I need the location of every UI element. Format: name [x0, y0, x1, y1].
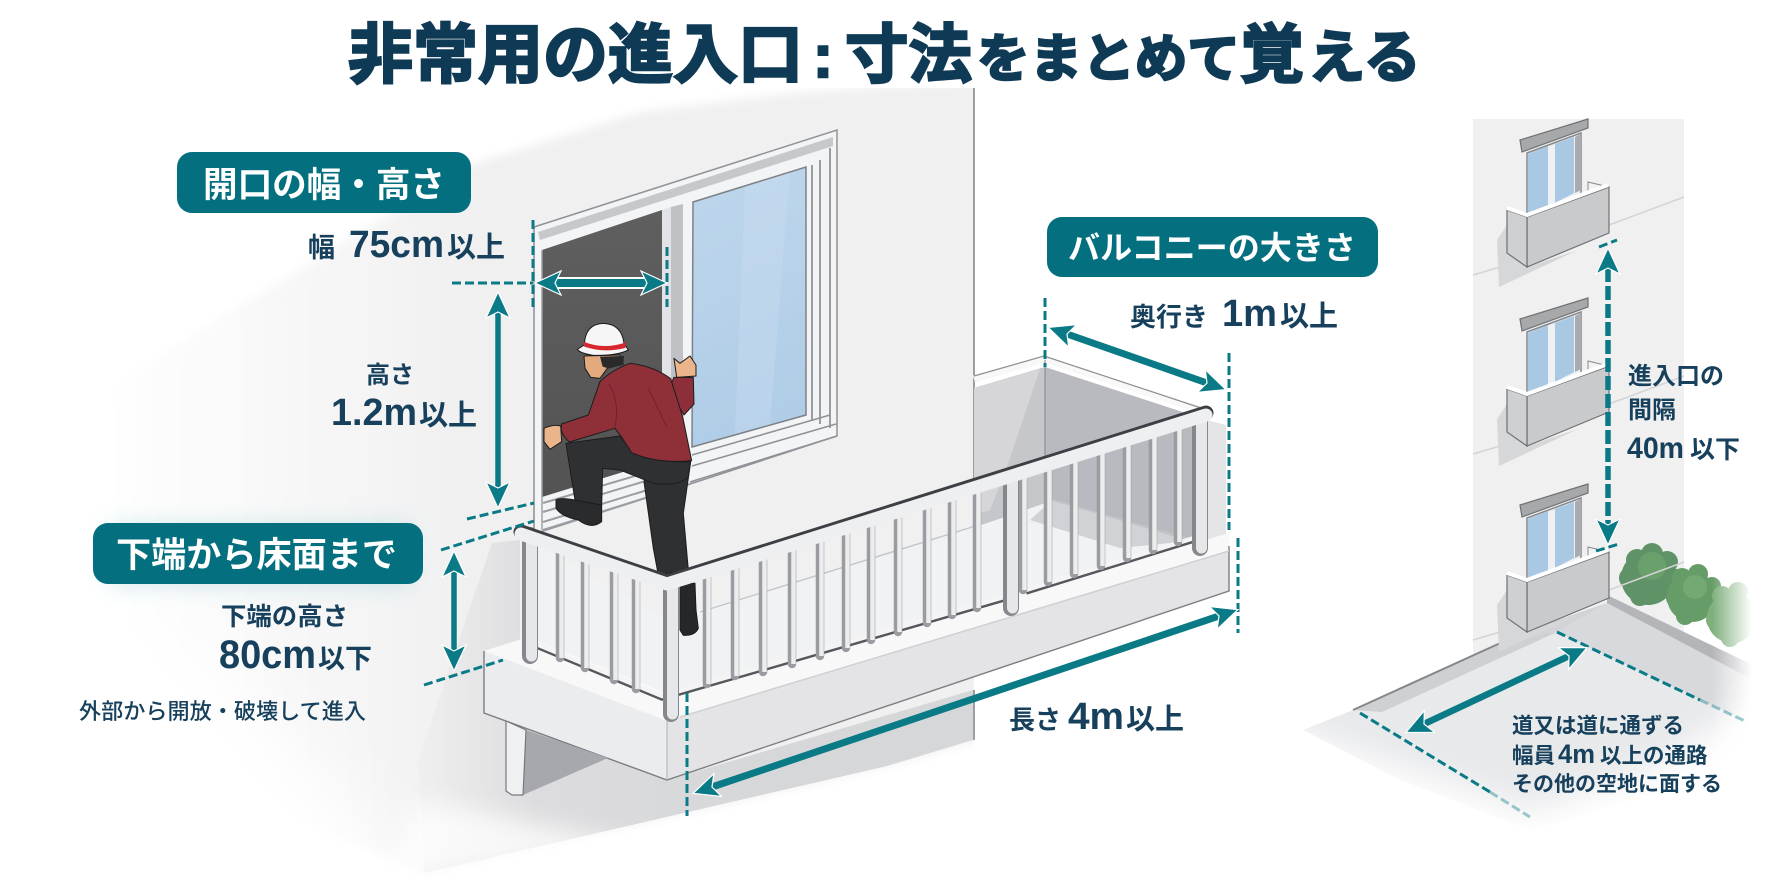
worker climbing in	[544, 323, 698, 635]
fade at foot of shadow	[380, 800, 640, 880]
text: width 75cm or more: 以上	[447, 231, 505, 264]
text: depth 1m or more: 以上	[1280, 300, 1338, 333]
text: length 4m or more: 4m	[1068, 696, 1124, 738]
white helmet	[577, 323, 628, 355]
text: faces road or open space: 4m	[1558, 739, 1595, 769]
title: 寸法	[845, 19, 972, 91]
text: length 4m or more: 長さ	[1009, 705, 1061, 735]
title: :	[813, 23, 833, 90]
glow behind sill banner	[110, 525, 410, 585]
hedge	[1619, 543, 1757, 647]
red work jacket	[561, 363, 694, 461]
label: sill to floor banner: 下端から床面まで	[116, 536, 397, 575]
text: sill height 80cm or less: 以下	[318, 644, 372, 674]
hand on frame	[674, 356, 696, 377]
balcony railing	[521, 413, 1206, 714]
text: depth 1m or more: 1m	[1222, 293, 1277, 335]
text: sill height 80cm or less: 下端の高さ	[221, 603, 348, 631]
text: entrance spacing 40m or less: 間隔	[1628, 397, 1676, 424]
standing leg	[644, 457, 698, 635]
text: faces road or open space: その他の空地に面する	[1512, 773, 1722, 796]
hair	[600, 356, 624, 368]
label: opening width and height banner: 開口の幅・高さ	[203, 166, 445, 205]
text: width 75cm or more: 幅	[308, 233, 335, 263]
fade of ground and hedge edges	[1270, 540, 1774, 887]
label: balcony size banner: バルコニーの大きさ	[1068, 230, 1356, 266]
label: opening width and height banner	[177, 152, 471, 213]
title: える	[1308, 26, 1421, 90]
text: sill height 80cm or less	[219, 603, 372, 677]
ground and access road	[1303, 595, 1770, 830]
text: width 75cm or more: 75cm	[349, 224, 444, 266]
title: 覚	[1240, 19, 1304, 91]
dimension: entrance spacing	[1596, 240, 1619, 551]
dimension: opening height	[441, 312, 534, 550]
text: height 1.2m or more: 高さ	[366, 362, 414, 389]
text: depth 1m or more: 奥行き	[1130, 302, 1208, 332]
neighbouring building face	[1473, 119, 1684, 654]
text: entrance spacing 40m or less	[1627, 363, 1740, 465]
dimension: balcony length	[687, 538, 1238, 816]
shadow under the balcony	[418, 540, 973, 873]
balcony recess side wall	[974, 356, 1226, 552]
text: entrance spacing 40m or less: 以下	[1690, 436, 1740, 464]
balcony bracket	[506, 721, 608, 795]
fade at lower left of the wall	[60, 540, 425, 887]
title: をまとめて	[977, 31, 1240, 89]
text: sill height 80cm or less: 80cm	[219, 633, 316, 677]
raised leg and boot	[556, 436, 691, 525]
text: entry from outside: 外部から開放・破壊して進入	[79, 699, 366, 724]
label: balcony size banner	[1047, 217, 1378, 277]
balcony slab	[484, 533, 1229, 780]
title	[348, 18, 1421, 91]
text: entrance spacing 40m or less: 進入口の	[1628, 363, 1724, 390]
text: length 4m or more: 以上	[1126, 703, 1184, 736]
text: faces road or open space	[1512, 714, 1722, 796]
text: depth 1m or more	[1130, 293, 1338, 335]
text: entrance spacing 40m or less: 40m	[1627, 432, 1684, 465]
text: faces road or open space: 道又は道に通ずる	[1512, 714, 1684, 738]
text: faces road or open space: 幅員	[1512, 744, 1555, 768]
dimension: balcony depth	[1045, 298, 1229, 530]
dimension: road width	[1360, 632, 1747, 817]
dimension: sill height	[424, 571, 503, 685]
text: height 1.2m or more: 1.2m	[331, 392, 417, 434]
label: sill to floor banner	[93, 523, 423, 584]
text: width 75cm or more	[308, 224, 505, 266]
window	[534, 130, 837, 532]
text: height 1.2m or more	[331, 362, 477, 434]
wall right corner line	[973, 88, 975, 740]
repeated balconies on the building	[1473, 119, 1684, 652]
main building wall	[304, 88, 974, 830]
head	[584, 355, 623, 378]
hand on jamb	[544, 425, 562, 449]
title: 非常用の進入口	[348, 18, 803, 91]
text: height 1.2m or more: 以上	[419, 399, 477, 432]
dimension: opening width	[452, 220, 667, 307]
text: faces road or open space: 以上の通路	[1600, 744, 1708, 768]
balcony floor	[530, 500, 1205, 716]
text: length 4m or more	[1009, 696, 1184, 738]
